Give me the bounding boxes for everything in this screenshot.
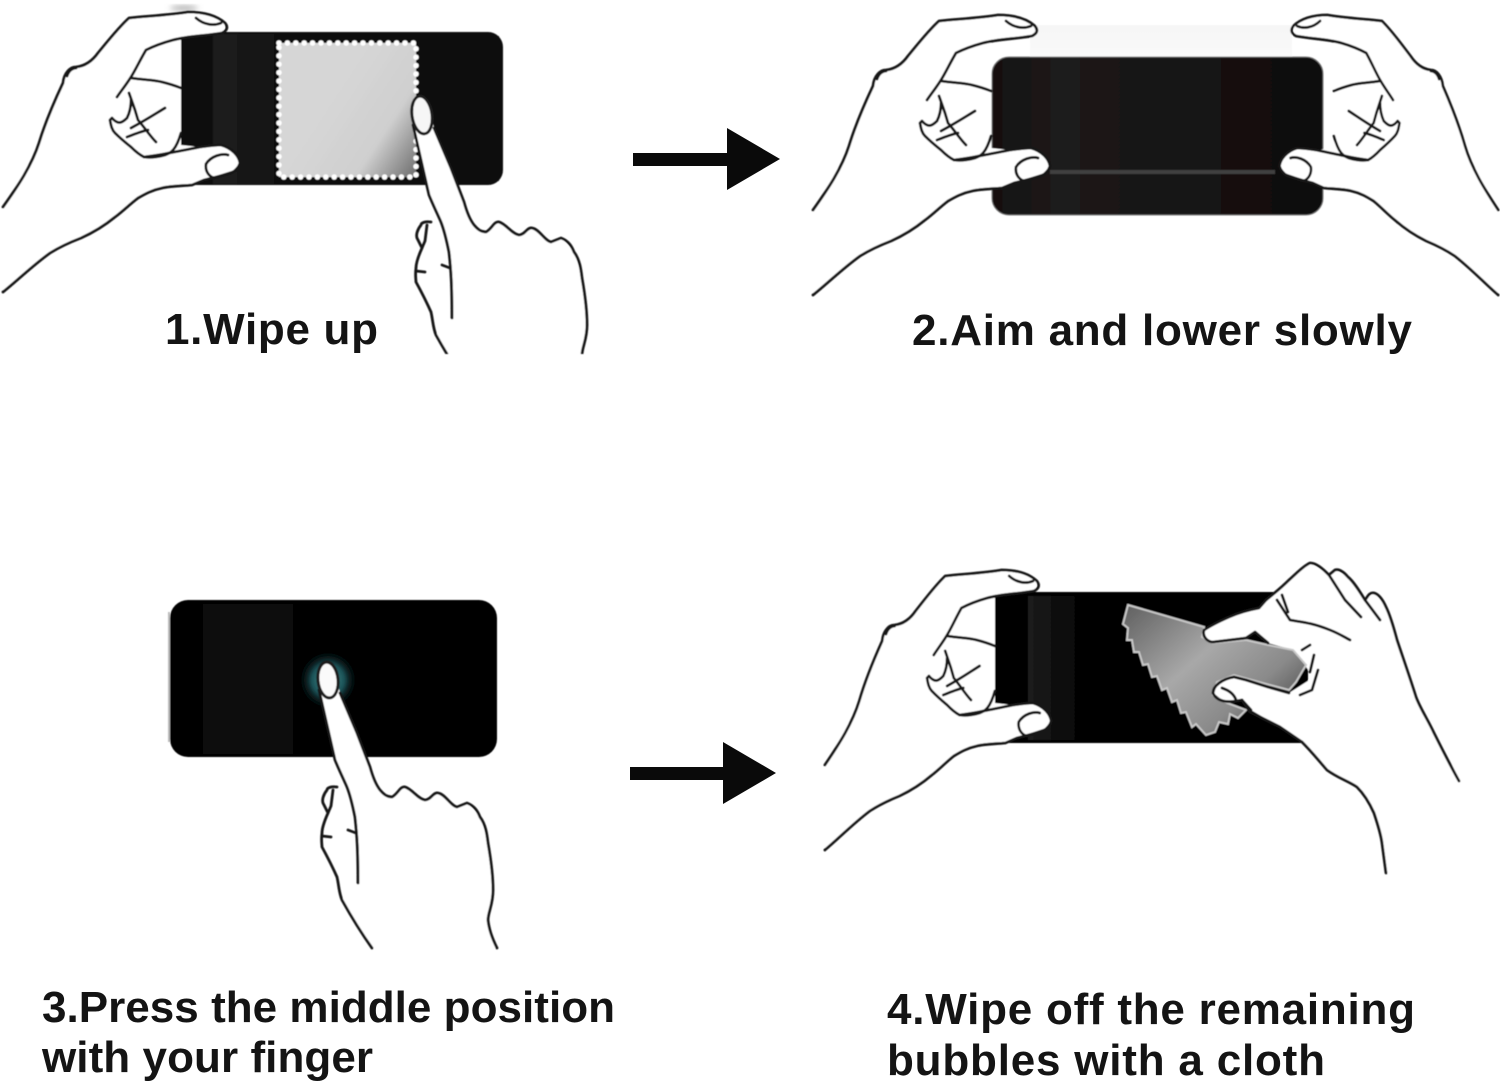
- icon: pointing finger wiping: [410, 94, 590, 355]
- panel: step 1 wipe up illustration: [3, 6, 591, 383]
- icon: left hand holding phone: [825, 570, 1051, 850]
- phone: step 3: [168, 600, 497, 757]
- icon: finger pressing screen: [316, 661, 497, 948]
- arrow: step 1 to step 2: [633, 128, 780, 190]
- panel: step 2 aim and lower illustration: [813, 15, 1498, 295]
- arrow: step 3 to step 4: [630, 742, 776, 804]
- caption: step 3: 3.Press the middle position: [42, 983, 615, 1032]
- caption: step 1: 1.Wipe up: [165, 305, 378, 354]
- caption: step 3 second line: with your finger: [41, 1033, 373, 1082]
- cleaning cloth: step 4: [1123, 605, 1318, 742]
- phone: step 4: [995, 592, 1308, 743]
- phone: step 1: [181, 32, 503, 185]
- cleaning cloth: step 1: [279, 43, 416, 177]
- phone: step 2: [992, 57, 1323, 215]
- icon: right hand lowering film: [1279, 15, 1498, 295]
- panel: step 4 wipe off bubbles illustration: [825, 563, 1463, 873]
- caption: step 2: 2.Aim and lower slowly: [912, 306, 1413, 355]
- caption: step 4: 4.Wipe off the remaining: [887, 985, 1415, 1034]
- icon: left hand holding phone: [3, 12, 240, 292]
- icon: right hand gripping cloth: [1202, 563, 1463, 873]
- caption: step 4 second line: bubbles with a cloth: [887, 1036, 1325, 1085]
- panel: step 3 press the middle illustration: [168, 600, 497, 948]
- icon: left hand lowering film: [813, 15, 1050, 295]
- smudge: motion blur above finger: [170, 6, 198, 10]
- protective film ghost above phone: [1030, 25, 1292, 59]
- touch glow around fingertip: [298, 650, 358, 710]
